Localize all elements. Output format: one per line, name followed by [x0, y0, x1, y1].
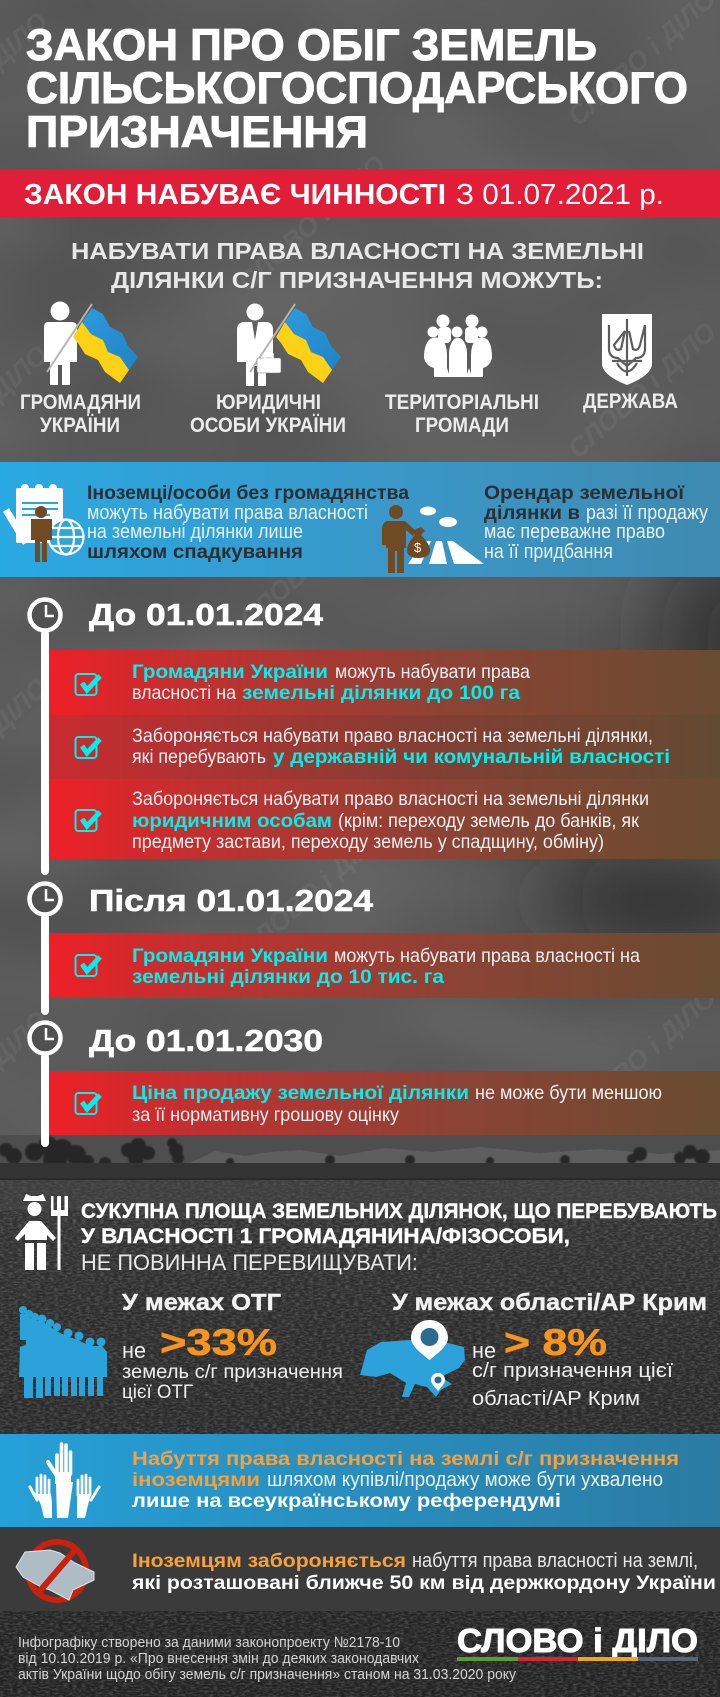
- logo: Slovo i Dilo: СЛОВО і ДІЛО: [457, 1622, 698, 1659]
- watermarks: [0, 0, 720, 1153]
- heading: total land area limit: НЕ ПОВИННА ПЕРЕВИЩУВАТИ:: [81, 1250, 418, 1275]
- block: limit within oblast: [360, 1289, 707, 1410]
- panel: citizens up to 10 thousand ha: можуть набувати права власності на: [334, 945, 640, 967]
- text: foreigners: шляхом спадкування: [87, 542, 303, 563]
- text: border zone: [131, 1550, 716, 1594]
- panel: legal entities prohibited: Забороняється набувати право власності на земельні ділянки: [132, 788, 649, 810]
- timeline line: [41, 914, 49, 1015]
- icon: map of Ukraine with pins: [360, 1320, 465, 1397]
- panel: sale price: Ціна продажу земельної ділянки: [132, 1083, 469, 1104]
- heading: who can acquire ownership: [71, 238, 644, 293]
- heading: within community: У межах ОТГ: [122, 1289, 281, 1315]
- footnote: source: [18, 1634, 516, 1683]
- text: foreigners: [87, 483, 409, 563]
- red banner: effective date: ЗАКОН НАБУВАЄ ЧИННОСТІ: [24, 179, 446, 211]
- label: territorial communities: [385, 391, 539, 437]
- text: referendum: іноземцями: [132, 1470, 260, 1491]
- panel: citizens up to 100 ha: Громадяни України: [132, 662, 328, 683]
- heading: who can acquire ownership: НАБУВАТИ ПРАВА ВЛАСНОСТІ НА ЗЕМЕЛЬНІ: [71, 238, 644, 264]
- footnote: source: актів України щодо обігу земель с/г призначення» станом на 31.03.2020 року: [18, 1666, 516, 1683]
- icon: raised hands: [30, 1444, 99, 1518]
- panel: legal entities prohibited: (крім: переходу земель до банків, як: [338, 810, 639, 832]
- icon: crowd: [19, 1306, 107, 1398]
- panel: state or communal land prohibited: які перебувають: [132, 746, 266, 768]
- heading: after 01.01.2024: Після 01.01.2024: [89, 883, 374, 918]
- heading: until 01.01.2030: До 01.01.2030: [89, 1023, 323, 1058]
- icon: clock: [30, 600, 60, 630]
- text: referendum: Набуття права власності на землі с/г призначення: [132, 1449, 679, 1470]
- title: [26, 21, 688, 157]
- panel: referendum: [0, 1434, 720, 1527]
- text: referendum: лише на всеукраїнському референдумі: [132, 1491, 561, 1512]
- panel: legal entities prohibited: предмету застави, переходу земель у спадщину, обміну): [132, 831, 604, 853]
- text: border zone: набуття права власності на землі,: [412, 1550, 698, 1572]
- text: not more than 8 percent: [472, 1322, 673, 1410]
- text: not more than 8 percent: не: [472, 1338, 496, 1363]
- text: not more than 8 percent: с/г призначення цієї: [472, 1360, 673, 1382]
- text: referendum: [132, 1449, 679, 1512]
- footnote: source: від 10.10.2019 р. «Про внесення змін до деяких законодавчих: [18, 1650, 419, 1667]
- text: tenant: [484, 483, 708, 563]
- heading: total land area limit: [81, 1200, 717, 1275]
- heading: until 01.01.2024: До 01.01.2024: [89, 597, 324, 632]
- icon: tenant with money bag and field: $: [414, 540, 422, 555]
- label: legal entities: ОСОБИ УКРАЇНИ: [190, 414, 346, 437]
- panel: sale price: не може бути меншою: [475, 1082, 662, 1104]
- text: tenant: на її придбання: [484, 541, 613, 563]
- panel: legal entities prohibited: [49, 779, 720, 859]
- text: tenant: ділянки в: [484, 503, 580, 524]
- heading: total land area limit: У ВЛАСНОСТІ 1 ГРОМАДЯНИНА/ФІЗОСОБИ,: [81, 1225, 570, 1248]
- text: not more than 33 percent: цієї ОТГ: [122, 1381, 193, 1403]
- text: foreigners: на земельні ділянки лише: [87, 521, 303, 543]
- panel: state or communal land prohibited: у державній чи комунальній власності: [273, 747, 670, 768]
- timeline line: [41, 1053, 49, 1147]
- panel: foreigners and tenants: [0, 462, 720, 577]
- icon: territorial community group: [424, 314, 492, 377]
- watermarks: СЛОВО і ДІЛО: [562, 982, 720, 1130]
- text: not more than 8 percent: області/АР Крим: [472, 1388, 640, 1410]
- panel: citizens up to 10 thousand ha: земельні ділянки до 10 тис. га: [132, 967, 444, 988]
- label: territorial communities: ГРОМАДИ: [415, 414, 509, 437]
- watermarks: СЛОВО і ДІЛО: [234, 816, 394, 964]
- icon: farmer with pitchfork: [15, 1194, 68, 1270]
- watermarks: СЛОВО і ДІЛО: [562, 649, 720, 797]
- watermarks: СЛОВО і ДІЛО: [234, 486, 394, 634]
- icon: tenant with money bag and field: [382, 505, 484, 573]
- timeline line: [41, 630, 49, 875]
- panel: citizens up to 100 ha: [49, 650, 720, 715]
- panel: citizens up to 100 ha: власності на: [132, 682, 236, 704]
- panel: border zone prohibition: [0, 1527, 720, 1611]
- watermarks: СЛОВО і ДІЛО: [232, 149, 392, 297]
- panel: sale price: [49, 1071, 720, 1135]
- text: not more than 8 percent: > 8%: [504, 1322, 607, 1363]
- heading: total land area limit: СУКУПНА ПЛОЩА ЗЕМЕЛЬНИХ ДІЛЯНОК, ЩО ПЕРЕБУВАЮТЬ: [81, 1200, 717, 1223]
- text: not more than 33 percent: земель с/г призначення: [122, 1361, 343, 1383]
- icon: prohibited map: [16, 1542, 94, 1600]
- label: state: ДЕРЖАВА: [583, 390, 678, 413]
- text: tenant: разі її продажу: [586, 502, 708, 524]
- panel: citizens up to 10 thousand ha: [49, 933, 720, 998]
- icon: coat of arms trident: [602, 314, 652, 385]
- label: citizens: ГРОМАДЯНИ: [20, 391, 141, 414]
- text: tenant: має переважне право: [484, 521, 665, 543]
- icon: clock: [30, 884, 60, 914]
- text: referendum: шляхом купівлі/продажу може бути ухвалено: [267, 1469, 663, 1491]
- icon: legal entity with flag and briefcase: [237, 304, 341, 386]
- text: tenant: Орендар земельної: [484, 483, 685, 504]
- panel: legal entities prohibited: юридичним особам: [132, 811, 332, 832]
- heading: within oblast: У межах області/АР Крим: [392, 1289, 707, 1315]
- panel: citizens up to 10 thousand ha: Громадяни України: [132, 946, 328, 967]
- label: territorial communities: ТЕРИТОРІАЛЬНІ: [385, 391, 539, 414]
- timeline section: after 01.01.2024: [30, 883, 720, 1015]
- icon: clock: [30, 1022, 60, 1054]
- label: citizens: УКРАЇНИ: [40, 414, 120, 437]
- text: border zone: Іноземцям забороняється: [132, 1551, 406, 1572]
- title: ЗАКОН ПРО ОБІГ ЗЕМЕЛЬ: [26, 21, 597, 70]
- timeline section: until 01.01.2030: [30, 1022, 720, 1147]
- text: border zone: які розташовані ближче 50 км від держкордону України: [131, 1573, 716, 1594]
- text: foreigners: Іноземці/особи без громадянства: [87, 483, 409, 504]
- watermarks: СЛОВО і ДІЛО: [562, 316, 720, 464]
- panel: state or communal land prohibited: [49, 715, 720, 779]
- text: not more than 33 percent: не: [122, 1338, 146, 1363]
- text: not more than 33 percent: [122, 1322, 343, 1403]
- block: limit within community: [19, 1289, 343, 1403]
- red banner: effective date: [0, 169, 720, 217]
- panel: state or communal land prohibited: Забороняється набувати право власності на земельні ділянки,: [132, 725, 653, 747]
- red banner: effective date: З 01.07.2021 р.: [456, 179, 664, 211]
- label: citizens: [20, 391, 141, 437]
- panel: citizens up to 100 ha: земельні ділянки до 100 га: [242, 683, 520, 704]
- panel: citizens up to 100 ha: можуть набувати права: [335, 661, 530, 683]
- label: legal entities: ЮРИДИЧНІ: [216, 391, 321, 414]
- title: СІЛЬСЬКОГОСПОДАРСЬКОГО: [26, 64, 688, 113]
- text: foreigners: можуть набувати права власності: [87, 502, 368, 524]
- label: legal entities: [190, 391, 346, 437]
- text: not more than 33 percent: >33%: [160, 1322, 277, 1363]
- panel: sale price: за її нормативну грошову оцінку: [132, 1104, 399, 1126]
- icon: document, globe and person: [6, 484, 84, 562]
- icon: citizen with flag: [44, 302, 138, 385]
- heading: who can acquire ownership: ДІЛЯНКИ С/Г ПРИЗНАЧЕННЯ МОЖУТЬ:: [111, 267, 603, 293]
- footnote: source: Інфографіку створено за даними законопроекту №2178-10: [18, 1634, 400, 1651]
- title: ПРИЗНАЧЕННЯ: [26, 108, 368, 157]
- timeline section: until 01.01.2024: [30, 597, 720, 875]
